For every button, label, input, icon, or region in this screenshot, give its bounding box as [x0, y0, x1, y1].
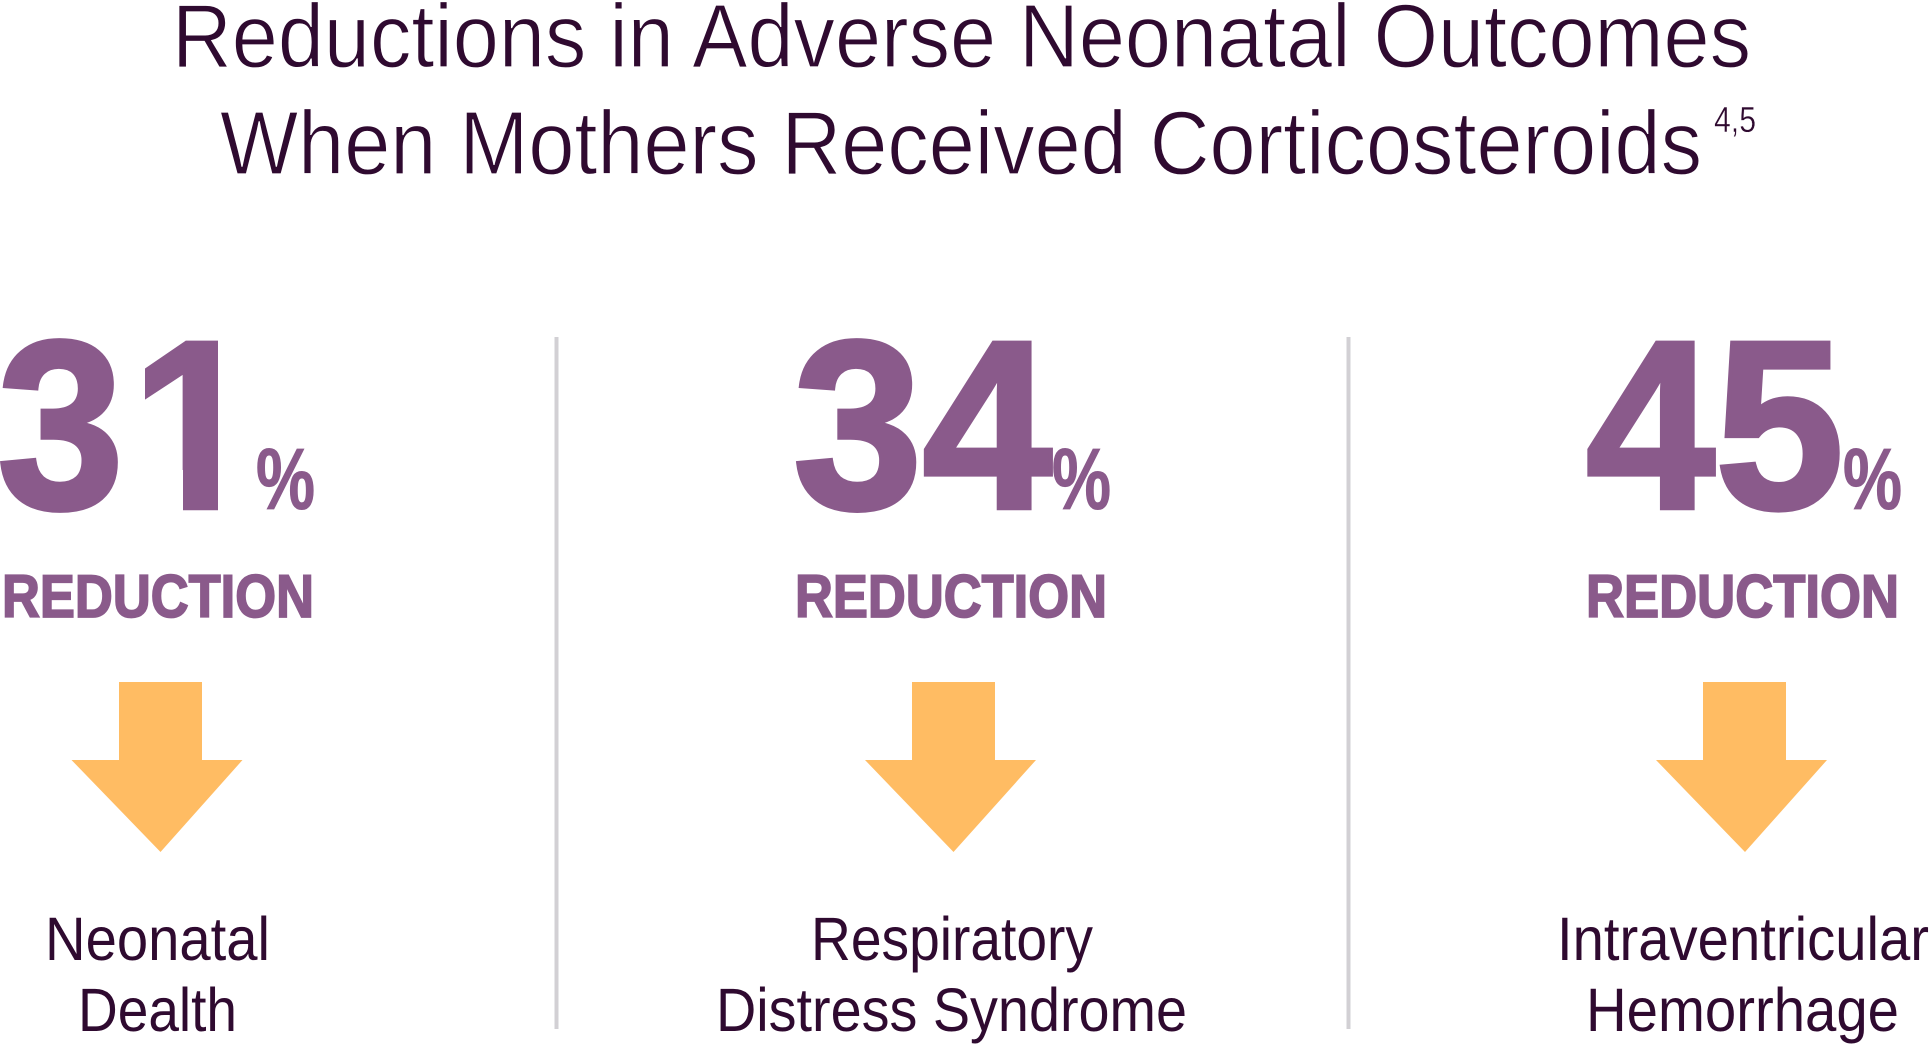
- outcome label: [45, 905, 270, 1044]
- stat: 45 percent: %: [1843, 432, 1902, 528]
- icon: down arrow: [72, 682, 242, 852]
- outcome label: [716, 905, 1187, 1044]
- stat: 34 percent: %: [1052, 432, 1111, 528]
- stat: 31 percent: %: [256, 432, 315, 528]
- stat: 45 percent: 45: [1586, 291, 1844, 559]
- title: When Mothers Received Corticosteroids: [220, 94, 1702, 194]
- icon: down arrow: [1656, 682, 1827, 852]
- outcome label: [1557, 905, 1929, 1044]
- title: 4,5: [1714, 99, 1756, 140]
- reduction label: REDUCTION: [795, 563, 1107, 630]
- outcome label: Dealth: [78, 976, 237, 1044]
- title: [172, 0, 1756, 194]
- panel: intraventricular hemorrhage: [1557, 291, 1929, 1044]
- stat: 31 percent: [0, 338, 314, 513]
- outcome label: Hemorrhage: [1586, 976, 1899, 1044]
- outcome label: Respiratory: [811, 905, 1093, 973]
- outcome label: Neonatal: [45, 905, 270, 973]
- outcome label: Distress Syndrome: [716, 976, 1187, 1044]
- panel: respiratory distress syndrome: [716, 291, 1187, 1044]
- stat: 34 percent: 34: [793, 291, 1052, 559]
- reduction label: REDUCTION: [2, 563, 314, 630]
- icon: down arrow: [865, 682, 1036, 852]
- panel: neonatal death: [0, 291, 315, 1044]
- stat: 31 percent: 31: [0, 291, 266, 559]
